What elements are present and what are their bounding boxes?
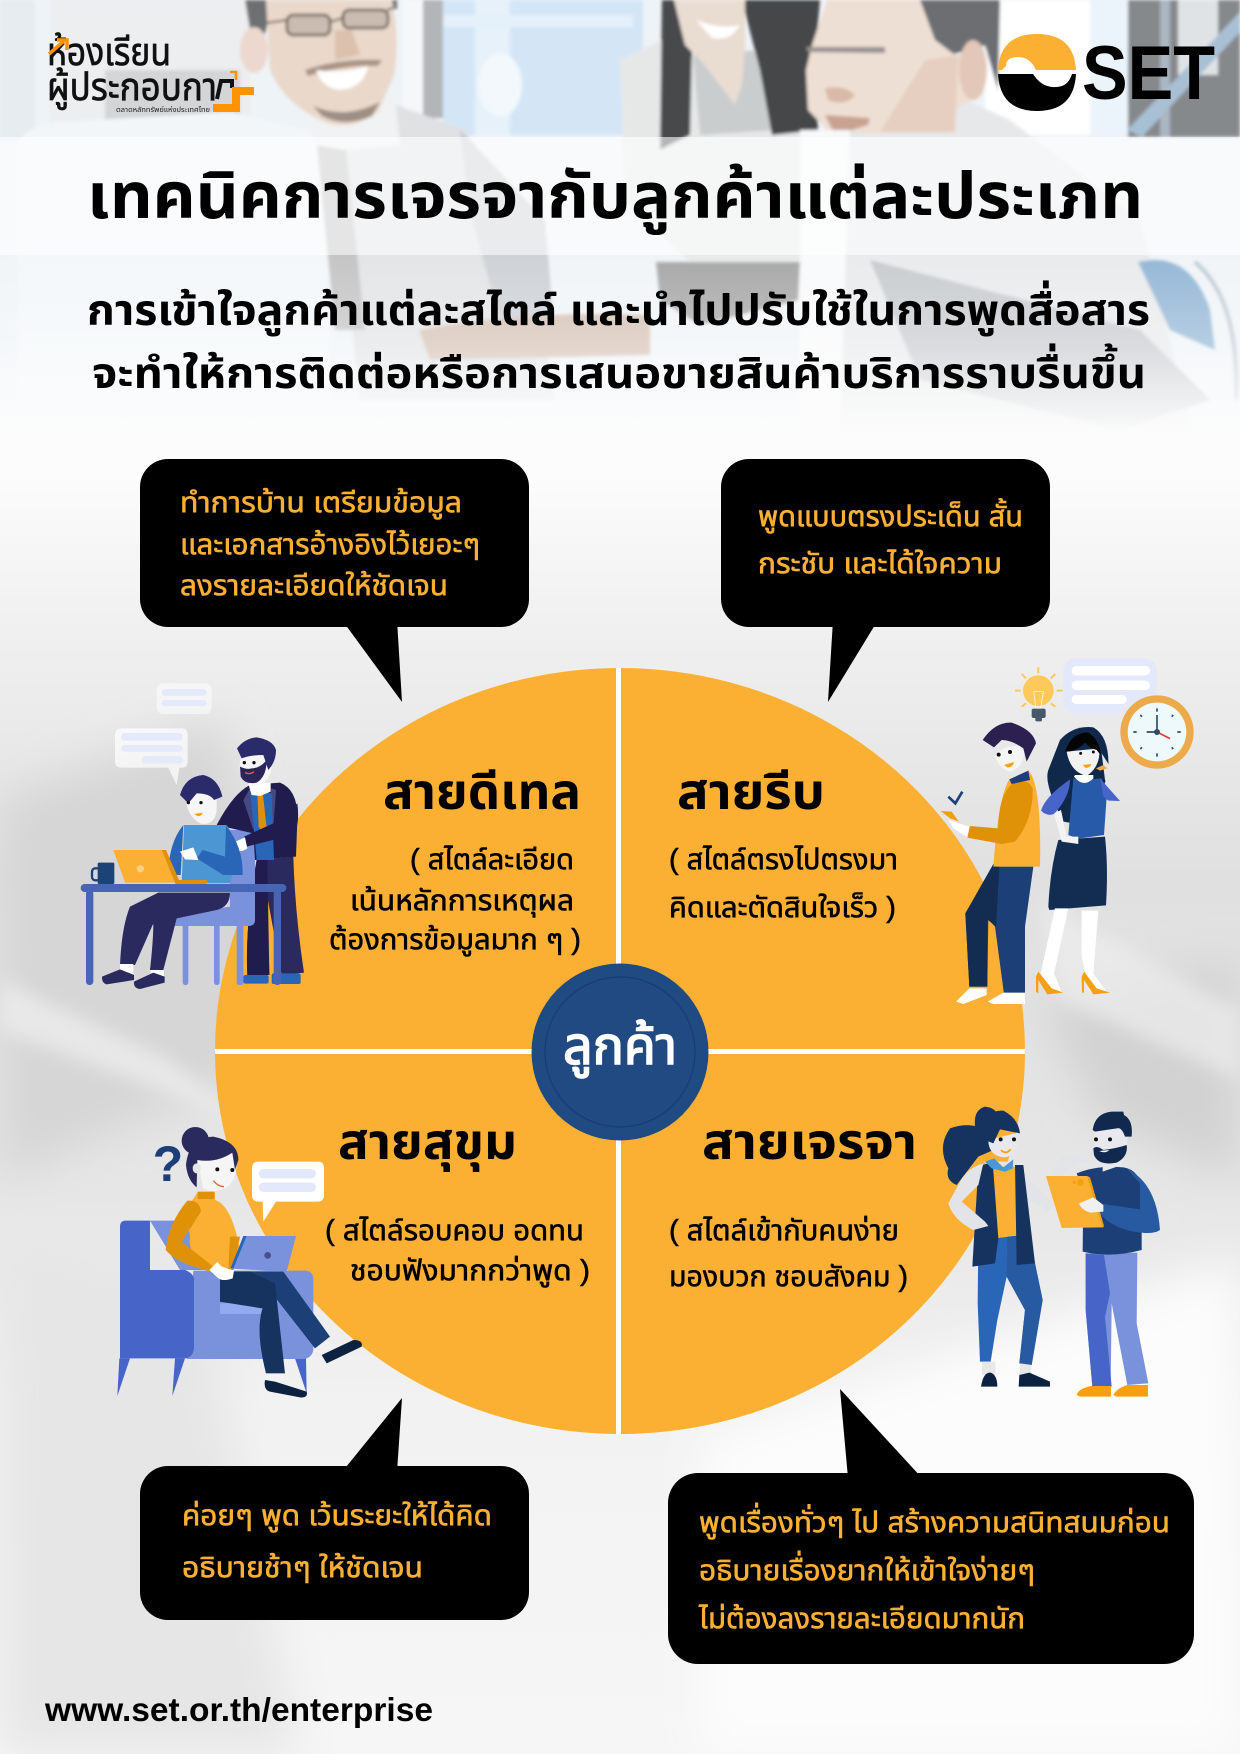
callout: negotiator style bbox=[668, 1389, 1194, 1664]
website url: www.set.or.th/enterprise bbox=[44, 1691, 433, 1728]
center badge: customer: ลูกค้า bbox=[563, 1017, 677, 1078]
quadrant: fast style: สายรีบ bbox=[677, 764, 825, 820]
title: เทคนิคการเจรจากับลูกค้าแต่ละประเภท bbox=[87, 160, 1143, 235]
callout: negotiator style: ไม่ต้องลงรายละเอียดมากนัก bbox=[698, 1603, 1025, 1635]
header photo: three business people bbox=[0, 0, 1240, 460]
callout: fast style bbox=[721, 459, 1050, 702]
logo: SET bbox=[998, 31, 1215, 116]
illustration: woman on sofa with laptop: ? bbox=[153, 1136, 183, 1192]
quadrant: detail style: สายดีเทล bbox=[383, 764, 581, 820]
quadrant: detail style: ต้องการข้อมูลมาก ๆ ) bbox=[329, 924, 581, 957]
callout: fast style: กระชับ และได้ใจความ bbox=[758, 548, 1002, 580]
logo: SET: SET bbox=[1082, 31, 1215, 116]
logo: classroom for entrepreneurs: ผู้ประกอบกา bbox=[47, 67, 217, 110]
callout: detail style bbox=[140, 459, 529, 702]
quadrant: fast style bbox=[669, 764, 898, 924]
skirt bbox=[656, 262, 800, 325]
quadrant: calm style: สายสุขุม bbox=[338, 1114, 517, 1172]
quadrant: calm style bbox=[325, 1114, 590, 1288]
center badge: customer bbox=[532, 964, 708, 1140]
quadrant: negotiator style: ( สไตล์เข้ากับคนง่าย bbox=[669, 1215, 899, 1247]
right man bbox=[800, 95, 1195, 440]
quadrant: detail style: ( สไตล์ละเอียด bbox=[410, 844, 574, 876]
callout: calm style bbox=[140, 1398, 529, 1620]
quadrant: fast style: คิดและตัดสินใจเร็ว ) bbox=[669, 892, 896, 924]
illustration: woman and bearded man with clipboard bbox=[943, 1107, 1160, 1397]
callout: detail style: ทำการบ้าน เตรียมข้อมูล bbox=[180, 487, 462, 520]
quadrant: negotiator style bbox=[669, 1114, 917, 1293]
subtitle bbox=[87, 280, 1150, 398]
illustration: two men at a desk bbox=[81, 683, 304, 989]
lower scene bbox=[419, 314, 650, 360]
logo: classroom for entrepreneurs: ตลาดหลักทรัพย์แห่งประเทศไทย bbox=[116, 105, 210, 114]
quadrant: negotiator style: มองบวก ชอบสังคม ) bbox=[669, 1261, 908, 1293]
quadrant: negotiator style: สายเจรจา bbox=[702, 1114, 917, 1170]
monitor bbox=[16, 112, 330, 400]
callout: negotiator style: อธิบายเรื่องยากให้เข้าใจง่ายๆ bbox=[699, 1550, 1035, 1587]
quadrant: detail style bbox=[329, 764, 581, 957]
callout: calm style: ค่อยๆ พูด เว้นระยะให้ได้คิด bbox=[182, 1500, 492, 1533]
quadrant: calm style: ( สไตล์รอบคอบ อดทน bbox=[325, 1215, 584, 1247]
central quadrant chart bbox=[215, 668, 1025, 1434]
callout: detail style: และเอกสารอ้างอิงไว้เยอะๆ bbox=[180, 529, 480, 561]
logo: classroom for entrepreneurs bbox=[47, 32, 254, 114]
quadrant: detail style: เน้นหลักการเหตุผล bbox=[350, 885, 574, 917]
subtitle: การเข้าใจลูกค้าแต่ละสไตล์ และนำไปปรับใช้ในการพูดสื่อสาร bbox=[87, 280, 1150, 336]
illustration: man and woman with clock and bulb bbox=[941, 658, 1194, 1004]
callout: fast style: พูดแบบตรงประเด็น สั้น bbox=[758, 498, 1023, 534]
callout: detail style: ลงรายละเอียดให้ชัดเจน bbox=[180, 570, 448, 602]
quadrant: calm style: ชอบฟังมากกว่าพูด ) bbox=[350, 1255, 590, 1288]
left man bbox=[330, 100, 555, 400]
callout: calm style: อธิบายช้าๆ ให้ชัดเจน bbox=[182, 1552, 423, 1584]
logo: classroom for entrepreneurs: ห้องเรียน bbox=[47, 32, 171, 74]
subtitle: จะทำให้การติดต่อหรือการเสนอขายสินค้าบริการราบรื่นขึ้น bbox=[92, 343, 1146, 398]
woman bbox=[620, 40, 830, 262]
quadrant: fast style: ( สไตล์ตรงไปตรงมา bbox=[669, 844, 898, 876]
callout: negotiator style: พูดเรื่องทั่วๆ ไป สร้างความสนิทสนมก่อน bbox=[699, 1502, 1170, 1540]
illustration: woman on sofa with laptop bbox=[117, 1127, 362, 1397]
